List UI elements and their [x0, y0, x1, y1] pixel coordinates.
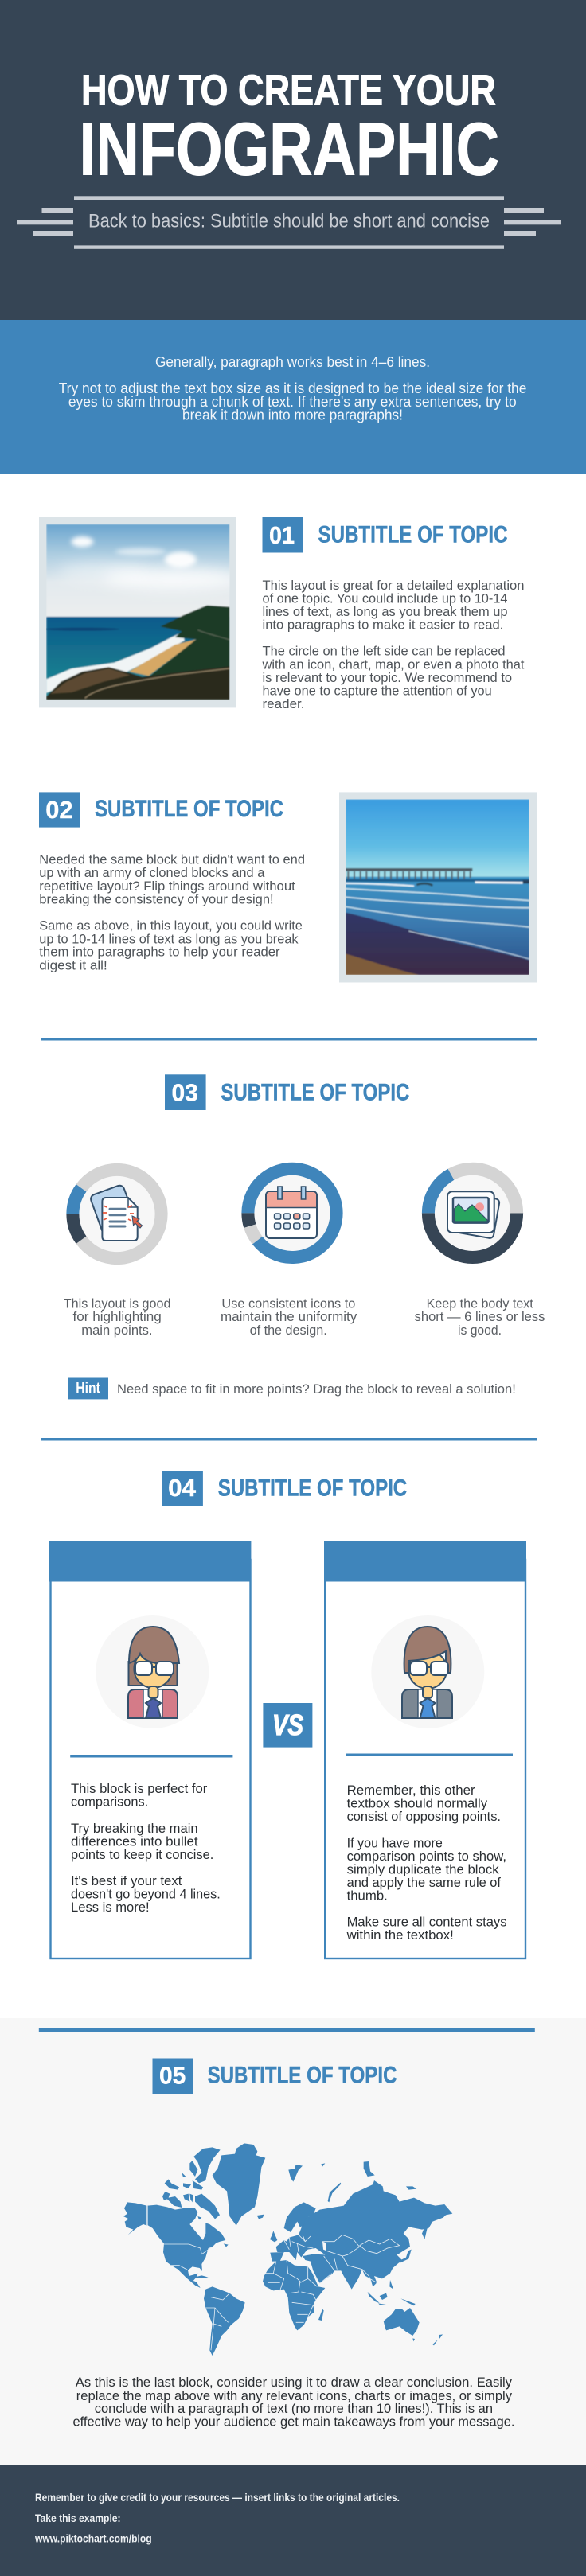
number badge 05 [153, 2058, 193, 2094]
body text 02: breaking the consistency of your design! [39, 892, 274, 907]
card text: It's best if your text [71, 1873, 182, 1888]
vs badge [263, 1703, 312, 1748]
world map [123, 2143, 452, 2356]
heading 04: SUBTITLE OF TOPIC [218, 1475, 407, 1501]
card text: points to keep it concise. [71, 1847, 213, 1862]
icon: picture donut [428, 1169, 517, 1257]
body text 01: with an icon, chart, map, or even a photo that [262, 657, 525, 672]
card divider [346, 1754, 513, 1756]
number badge 02 [39, 792, 80, 828]
conclusion text: replace the map above with any relevant icons, charts or images, or simply [76, 2388, 512, 2403]
body text 02: digest it all! [39, 958, 107, 972]
divider rule [41, 1038, 537, 1041]
panel: footer: www.piktochart.com/blog [34, 2532, 152, 2545]
caption 2 [221, 1296, 357, 1338]
panel: intro paragraph: Generally, paragraph works best in 4–6 lines. [155, 354, 430, 370]
number badge 05: 05 [159, 2061, 186, 2089]
body text 02: Needed the same block but didn't want to end [39, 852, 305, 867]
card text: simply duplicate the block [347, 1861, 499, 1876]
conclusion text: effective way to help your audience get main takeaways from your message. [73, 2414, 514, 2429]
photo: pier and waves [339, 792, 537, 982]
number badge 04: 04 [168, 1474, 197, 1502]
caption 3: short — 6 lines or less [415, 1309, 545, 1324]
subtitle ribbon [17, 196, 561, 249]
title: HOW TO CREATE YOUR [81, 66, 496, 114]
body text 01 [262, 578, 525, 711]
body text 01: have one to capture the attention of you [263, 683, 492, 698]
panel: footer [0, 2465, 586, 2576]
card text [71, 1781, 221, 1915]
caption 2: of the design. [250, 1323, 327, 1338]
panel: section 04 [49, 1471, 526, 1958]
panel: right comparison card [324, 1541, 526, 1958]
body text 01: lines of text, as long as you break them up [263, 604, 508, 619]
conclusion text [73, 2375, 514, 2429]
card text: If you have more [347, 1835, 443, 1850]
body text 02: repetitive layout? Flip things around without [39, 879, 295, 894]
heading 05: SUBTITLE OF TOPIC [207, 2063, 397, 2088]
card text: doesn't go beyond 4 lines. [71, 1887, 221, 1902]
card text: and apply the same rule of [347, 1875, 501, 1890]
hint callout: Hint [76, 1380, 100, 1397]
card text: textbox should normally [347, 1795, 488, 1810]
panel: left comparison card [49, 1541, 251, 1958]
body text 02: Same as above, in this layout, you could write [39, 918, 303, 933]
caption 3: Keep the body text [427, 1296, 533, 1311]
caption 1: This layout is good [64, 1296, 170, 1311]
body text 01: The circle on the left side can be replaced [263, 644, 505, 659]
caption 3: is good. [458, 1323, 502, 1338]
body text 01: of one topic. You could include up to 10-14 [263, 591, 508, 606]
caption 1 [64, 1296, 170, 1338]
body text 01: is relevant to your topic. We recommend to [263, 670, 512, 685]
body text 01: reader. [263, 696, 304, 711]
panel: header [0, 0, 586, 320]
caption 1: for highlighting [73, 1309, 162, 1324]
avatar: man [371, 1615, 484, 1728]
card text: comparisons. [71, 1795, 148, 1810]
body text 01: into paragraphs to make it easier to read. [263, 618, 503, 632]
photo: coastline [39, 517, 241, 707]
card divider [70, 1755, 232, 1757]
card text: Make sure all content stays [347, 1915, 506, 1929]
number badge 04 [162, 1471, 203, 1506]
card text: consist of opposing points. [347, 1809, 501, 1824]
hint callout: Need space to fit in more points? Drag the block to reveal a solution! [117, 1382, 516, 1397]
conclusion text: conclude with a paragraph of text (no more than 10 lines!). This is an [95, 2401, 493, 2416]
icon: document donut [72, 1170, 162, 1258]
icon: calendar donut [248, 1169, 337, 1257]
heading 02: SUBTITLE OF TOPIC [95, 796, 283, 822]
card text: Less is more! [71, 1900, 150, 1915]
number badge 02: 02 [45, 796, 73, 824]
heading 03: SUBTITLE OF TOPIC [221, 1079, 409, 1106]
body text 02: them into paragraphs to help your reader [39, 945, 280, 960]
panel: section 02 [39, 792, 537, 982]
caption 2: maintain the uniformity [221, 1309, 357, 1324]
card text: differences into bullet [71, 1834, 198, 1849]
card text: thumb. [347, 1888, 388, 1904]
panel: intro paragraph: break it down into more paragraphs! [182, 407, 403, 423]
number badge 03: 03 [172, 1079, 198, 1106]
caption 2: Use consistent icons to [221, 1296, 355, 1311]
panel: intro paragraph: eyes to skim through a chunk of text. If there's any extra sentences, try to [68, 394, 517, 410]
card text: comparison points to show, [347, 1849, 506, 1864]
body text 01: This layout is great for a detailed explanation [263, 578, 524, 593]
hint callout [68, 1377, 516, 1399]
card text: Try breaking the main [71, 1821, 198, 1836]
panel: intro paragraph: Try not to adjust the text box size as it is designed to be the ideal size for the [59, 380, 526, 396]
avatar: woman [96, 1615, 209, 1728]
panel: section 05 [0, 2018, 586, 2465]
number badge 01 [263, 517, 303, 552]
divider rule [41, 1438, 537, 1440]
panel: intro paragraph [0, 320, 586, 474]
panel: footer: Remember to give credit to your resources — insert links to the original articles. [35, 2491, 400, 2504]
heading 01: SUBTITLE OF TOPIC [318, 522, 508, 548]
conclusion text: As this is the last block, consider using it to draw a clear conclusion. Easily [76, 2375, 512, 2390]
subtitle ribbon: Back to basics: Subtitle should be short and concise [88, 210, 490, 232]
card text [346, 1783, 506, 1943]
card text: within the textbox! [346, 1927, 454, 1943]
panel: footer: Take this example: [35, 2512, 121, 2524]
vs badge: VS [272, 1709, 303, 1741]
body text 02 [39, 852, 305, 972]
number badge 01: 01 [269, 521, 295, 549]
card text: This block is perfect for [71, 1781, 208, 1796]
panel: section 01 [39, 517, 525, 711]
number badge 03 [165, 1074, 206, 1110]
title [80, 66, 499, 191]
card text: Remember, this other [347, 1783, 475, 1798]
caption 1: main points. [81, 1323, 153, 1338]
panel: section 03 [64, 1074, 545, 1399]
caption 3 [415, 1296, 545, 1338]
body text 02: up to 10-14 lines of text as long as you break [39, 931, 299, 946]
body text 02: up with an army of cloned blocks and a [39, 865, 265, 880]
